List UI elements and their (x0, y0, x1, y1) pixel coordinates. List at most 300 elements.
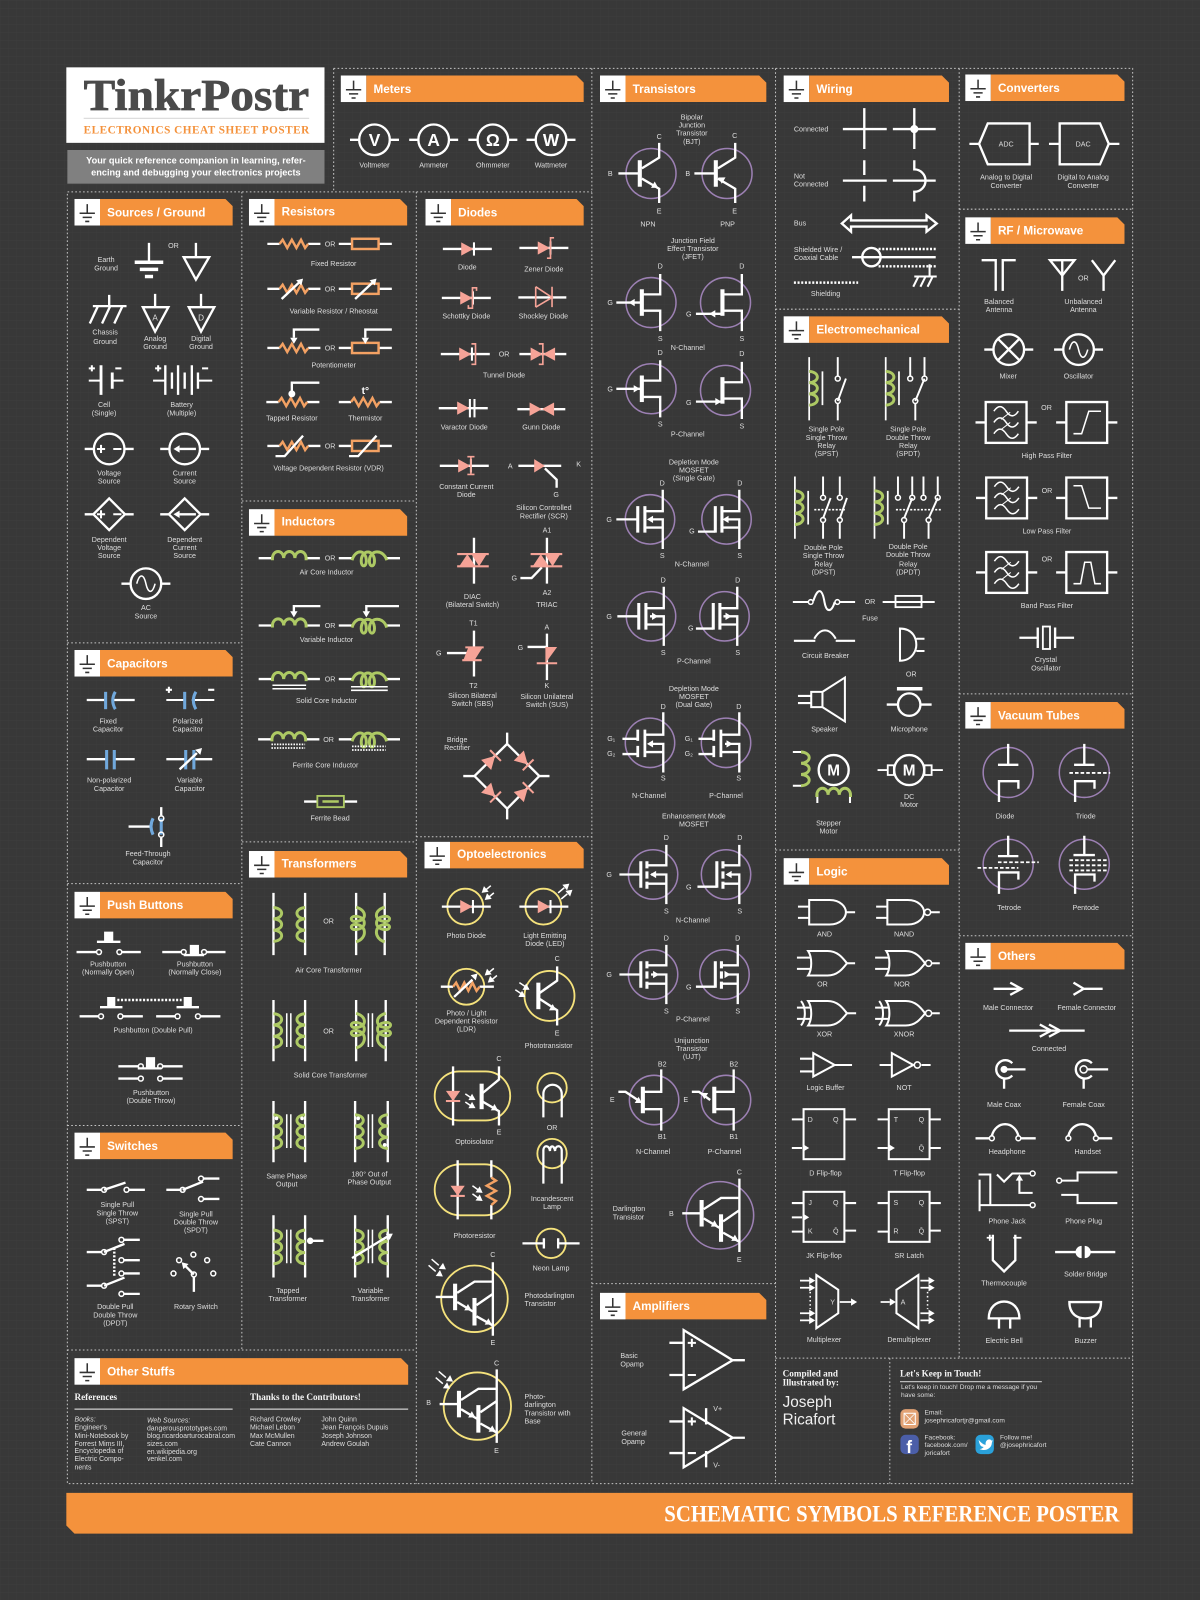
unbalanced antenna: Antenna (1070, 306, 1097, 314)
PNP transistor (685, 132, 752, 229)
D flip-flop (792, 1109, 856, 1178)
T flip-flop: Q̄ (919, 1144, 925, 1153)
voltmeter (350, 124, 399, 169)
DC motor: DC (904, 793, 914, 801)
SPST switch (87, 1183, 145, 1225)
JFET P-channel: D (739, 350, 744, 358)
neon lamp: Neon Lamp (533, 1264, 569, 1272)
female coax (1062, 1060, 1108, 1109)
references: Mini-Notebook by (74, 1433, 129, 1440)
JK flip-flop: Q̄ (833, 1228, 839, 1236)
SR latch: S (894, 1199, 899, 1207)
header: Amplifiers (600, 1293, 766, 1319)
bus: Bus (794, 220, 807, 228)
UJT N-channel: N-Channel (636, 1148, 671, 1156)
contact panel: Let's Keep in Touch! (900, 1369, 981, 1379)
analog to digital converter (969, 123, 1039, 190)
shielded wire: Shielded Wire / (794, 246, 842, 254)
cell (89, 365, 123, 417)
digital ground (189, 294, 214, 351)
header: Electromechanical: Electromechanical (816, 324, 920, 337)
solid core transformer: Solid Core Transformer (294, 1072, 368, 1080)
SPDT relay: Double Throw (886, 434, 931, 442)
contributors: Max McMullen (250, 1433, 295, 1440)
panel: push buttons (74, 892, 233, 1105)
SPST switch: (SPST) (106, 1217, 129, 1225)
panel: wiring (784, 76, 949, 298)
icon: twitter (976, 1435, 994, 1454)
low pass filter (976, 478, 1117, 536)
SPDT switch: (SPDT) (184, 1227, 208, 1235)
current source: Current (173, 470, 197, 478)
male connector (983, 983, 1034, 1012)
photodarlington transistor with base: darlington (524, 1401, 556, 1409)
neon lamp (522, 1229, 580, 1272)
tagline box: Your quick reference companion in learning, refer- (86, 155, 306, 165)
XOR gate (797, 1001, 856, 1039)
variable inductor: OR (325, 622, 335, 630)
stepper motor: Stepper (816, 820, 842, 828)
T flip-flop (878, 1109, 941, 1178)
JFET title: (JFET) (682, 253, 704, 261)
SPST relay: Relay (817, 442, 836, 450)
diode tube (983, 744, 1033, 820)
shockley diode (518, 287, 568, 320)
icon: email (900, 1409, 919, 1429)
icon: facebook: f (906, 1437, 912, 1457)
shielding: Shielding (811, 290, 840, 298)
ohmmeter: Ohmmeter (476, 161, 510, 169)
XNOR gate (875, 1001, 940, 1039)
depletion dual gate transistors: G₂ (685, 750, 693, 758)
analog ground (143, 294, 168, 351)
tagline box: encing and debugging your electronics projects (91, 168, 301, 178)
diode: Diode (458, 263, 477, 271)
earth ground: Earth (98, 256, 115, 264)
battery: (Multiple) (167, 409, 196, 417)
DPST relay: (DPST) (812, 568, 835, 576)
header: Converters (965, 74, 1124, 101)
triode tube (1059, 744, 1110, 820)
pushbutton normally close: (Normally Close) (168, 968, 221, 976)
mixer (984, 334, 1033, 381)
bridge rectifier (444, 733, 549, 819)
ammeter (409, 124, 458, 169)
high pass filter (976, 402, 1117, 460)
solid core inductor: Solid Core Inductor (296, 697, 358, 705)
depletion P-channel: S (735, 649, 740, 657)
PNP transistor: PNP (720, 221, 735, 229)
stepper motor (793, 752, 851, 836)
zener diode (519, 238, 568, 273)
enhancement P-channel: G (686, 983, 692, 991)
twitter text: @josephricafort (1000, 1442, 1047, 1449)
contributors: Jean François Dupuis (321, 1425, 389, 1432)
optoisolator (435, 1055, 510, 1146)
dependent current source (160, 498, 209, 560)
photodarlington transistor: Photodarlington (524, 1292, 574, 1300)
voltage source (85, 434, 134, 486)
air core transformer: OR (323, 917, 334, 925)
header: Transistors: Transistors (633, 83, 696, 96)
header: Push Buttons (74, 892, 233, 918)
pushbutton normally open: (Normally Open) (82, 968, 134, 976)
DPDT switch: Double Pull (97, 1303, 134, 1311)
fixed resistor: OR (325, 240, 335, 248)
dependent current source: Dependent (167, 536, 202, 544)
digital ground: D (198, 313, 204, 322)
tapped resistor: Tapped Resistor (266, 414, 318, 422)
tunnel diode (441, 344, 566, 380)
bridge rectifier: Rectifier (444, 744, 471, 752)
phototransistor: E (555, 1030, 560, 1038)
TRIAC: TRIAC (536, 601, 558, 609)
UJT N-channel: B2 (658, 1060, 667, 1068)
depletion P-channel: G (688, 625, 694, 633)
title block (66, 67, 324, 143)
header: Sources / Ground: Sources / Ground (107, 206, 205, 219)
enhancement P-channel: S (664, 1007, 669, 1015)
depletion dual gate transistors (607, 703, 751, 800)
TRIAC: A1 (543, 527, 551, 535)
references: en.wikipedia.org (147, 1449, 197, 1456)
band pass filter (976, 552, 1117, 610)
crystal oscillator: Crystal (1035, 656, 1057, 664)
header: Capacitors: Capacitors (107, 657, 168, 670)
multiplexer: Y (830, 1299, 835, 1307)
BJT title: (BJT) (683, 138, 701, 146)
silicon bilateral switch: T1 (469, 620, 478, 628)
zener diode: Zener Diode (524, 265, 564, 273)
multiplexer: Multiplexer (807, 1336, 842, 1344)
180 degree transformer: Phase Output (348, 1179, 391, 1187)
SR latch: Q (919, 1199, 925, 1207)
SPDT relay: Single Pole (890, 426, 926, 434)
enhancement P-channel: D (735, 934, 740, 942)
footer banner: SCHEMATIC SYMBOLS REFERENCE POSTER (664, 1501, 1120, 1527)
header: Optoelectronics (424, 842, 584, 868)
buzzer: Buzzer (1075, 1337, 1097, 1345)
phone jack (979, 1171, 1035, 1225)
phone plug: Phone Plug (1065, 1217, 1102, 1225)
pentode tube (1059, 836, 1109, 912)
cell: Cell (98, 401, 111, 409)
contributors (250, 1392, 408, 1448)
depletion N-channel (606, 480, 751, 568)
polarized capacitor: Capacitor (173, 726, 204, 734)
SPST relay: (SPST) (815, 450, 838, 458)
enhancement P-channel: G (606, 971, 612, 979)
depletion single gate title: (Single Gate) (673, 475, 715, 483)
contact panel (900, 1369, 1047, 1457)
speaker: Speaker (811, 726, 838, 734)
DC motor: Motor (900, 801, 919, 809)
pushbutton normally close: Pushbutton (177, 960, 213, 968)
references: Encyclopedia of (74, 1448, 123, 1455)
variable transformer (351, 1215, 395, 1303)
solid core transformer (273, 1000, 391, 1080)
JK flip-flop: Q (833, 1199, 839, 1207)
phototransistor (515, 955, 574, 1050)
silicon controlled rectifier: K (576, 460, 581, 468)
ohmmeter: Ω (486, 130, 500, 150)
JFET P-channel: P-Channel (671, 431, 705, 439)
current source: Source (173, 478, 196, 486)
photoresistor (435, 1160, 510, 1240)
dependent voltage source: Dependent (92, 536, 127, 544)
BJT title: Junction (679, 122, 705, 130)
facebook text: joricafort (923, 1450, 950, 1457)
microphone (887, 689, 932, 734)
UJT title: Unijunction (674, 1037, 709, 1045)
depletion single gate title: Depletion Mode (669, 458, 719, 466)
connected wires (794, 108, 936, 149)
silicon unilateral switch: K (545, 682, 550, 690)
DPDT relay: Double Pole (889, 543, 928, 551)
header: Logic (784, 858, 949, 885)
silicon unilateral switch (518, 624, 574, 709)
photodarlington transistor with base (426, 1359, 571, 1455)
incandescent lamp: Incandescent (531, 1195, 573, 1203)
chassis ground (90, 295, 127, 346)
solid core inductor: OR (325, 676, 335, 684)
DPST relay: Double Pole (804, 544, 843, 552)
ferrite core inductor (258, 733, 400, 769)
header: Diodes: Diodes (458, 206, 498, 219)
pushbutton double throw: Pushbutton (133, 1089, 169, 1097)
phone plug (1057, 1172, 1117, 1225)
JFET N-channel: S (658, 335, 663, 343)
depletion P-channel: P-Channel (677, 657, 711, 665)
panel: resistors (249, 199, 407, 472)
NOT gate (880, 1053, 931, 1092)
title: TinkrPostr (84, 70, 309, 120)
SPST switch: Single Throw (97, 1209, 139, 1217)
voltmeter: V (369, 130, 381, 150)
D flip-flop: D (808, 1116, 813, 1124)
voltmeter: Voltmeter (359, 161, 390, 169)
silicon controlled rectifier: A (508, 462, 513, 470)
basic opamp: Basic (620, 1352, 638, 1360)
ferrite core inductor: OR (323, 736, 334, 744)
UJT N-channel: E (610, 1096, 615, 1104)
JFET title: Effect Transistor (667, 245, 719, 253)
balanced antenna: Balanced (984, 298, 1014, 306)
ferrite core inductor: Ferrite Core Inductor (293, 761, 359, 769)
depletion dual gate transistors: S (661, 775, 666, 783)
darlington transistor: Transistor (613, 1213, 645, 1221)
credits: compiled by: Joseph (783, 1394, 832, 1411)
basic opamp: Opamp (620, 1360, 644, 1368)
light dependent resistor (435, 968, 498, 1034)
earth ground: Ground (94, 264, 118, 272)
header: Meters (341, 76, 584, 102)
enhancement N-channel: N-Channel (676, 916, 710, 924)
incandescent lamp: Lamp (543, 1203, 561, 1211)
general opamp: Opamp (621, 1438, 645, 1446)
references: sizes.com (147, 1441, 178, 1448)
polarized capacitor: Polarized (173, 717, 203, 725)
DPDT switch (87, 1237, 140, 1328)
twitter text: Follow me! (1000, 1434, 1032, 1441)
UJT P-channel: B1 (729, 1133, 738, 1141)
basic opamp (620, 1330, 745, 1389)
references (74, 1392, 235, 1471)
solid core inductor (259, 672, 400, 705)
T flip-flop: Q (919, 1116, 925, 1124)
SPST relay (806, 357, 848, 458)
ammeter: Ammeter (419, 161, 449, 169)
constant current diode: Diode (457, 491, 476, 499)
band pass filter: OR (1042, 556, 1052, 564)
header: Other Stuffs: Other Stuffs (107, 1366, 175, 1379)
depletion N-channel: G (689, 528, 695, 536)
credits: compiled by: Compiled and (783, 1369, 838, 1379)
DPST relay: Single Throw (803, 552, 845, 560)
tetrode tube (978, 836, 1039, 912)
header: Sources / Ground (74, 199, 233, 226)
BJT title: Transistor (676, 130, 708, 138)
email text: Email: (924, 1409, 943, 1416)
AND gate (798, 900, 855, 939)
silicon bilateral switch: T2 (469, 682, 478, 690)
logic buffer: Logic Buffer (807, 1084, 845, 1092)
UJT title: Transistor (676, 1045, 708, 1053)
darlington transistor: C (737, 1168, 742, 1176)
thermocouple: Thermocouple (981, 1280, 1027, 1288)
low pass filter: Low Pass Filter (1023, 528, 1072, 536)
dependent voltage source: Source (98, 552, 121, 560)
NAND gate: NAND (894, 931, 914, 939)
gunn diode: Gunn Diode (522, 424, 560, 432)
SPDT relay (886, 357, 931, 458)
digital to analog converter: Digital to Analog (1057, 174, 1109, 182)
electric bell (985, 1302, 1023, 1345)
oscillator (1054, 334, 1103, 381)
SPST relay: Single Pole (809, 426, 845, 434)
depletion dual gate transistors: G₁ (607, 735, 616, 743)
unbalanced antenna: OR (1078, 275, 1089, 283)
facebook text: Facebook: (924, 1434, 956, 1441)
depletion P-channel: D (661, 577, 666, 585)
diode (443, 242, 492, 271)
light dependent resistor: Dependent Resistor (435, 1017, 498, 1025)
light emitting diode: Light Emitting (523, 932, 567, 940)
JFET N-channel: D (739, 262, 744, 270)
JFET P-channel (607, 349, 751, 439)
references: References (74, 1392, 118, 1402)
high pass filter: High Pass Filter (1022, 452, 1073, 460)
UJT P-channel: B2 (729, 1060, 738, 1068)
header: Switches: Switches (107, 1140, 158, 1153)
TRIAC: G (512, 575, 518, 583)
JK flip-flop: K (808, 1228, 813, 1236)
DPDT relay: (DPDT) (896, 568, 920, 576)
references: Electric Compo- (74, 1456, 124, 1463)
JFET N-channel: D (658, 262, 663, 270)
header: RF / Microwave: RF / Microwave (998, 225, 1084, 238)
JFET P-channel: D (658, 349, 663, 357)
depletion P-channel: D (735, 577, 740, 585)
same phase transformer (266, 1101, 307, 1189)
JFET N-channel: G (607, 299, 613, 307)
balanced antenna (982, 260, 1016, 314)
photodarlington transistor with base: E (494, 1447, 499, 1455)
tapped transformer: Tapped (276, 1287, 299, 1295)
digital to analog converter (1049, 123, 1119, 190)
digital to analog converter: DAC (1076, 140, 1091, 148)
multiplexer (800, 1275, 857, 1344)
fixed capacitor (87, 692, 135, 734)
ammeter: A (427, 130, 440, 150)
header: Switches (74, 1133, 233, 1159)
header: Electromechanical (784, 316, 949, 343)
optoisolator: E (497, 1129, 502, 1137)
credits: compiled by (783, 1369, 839, 1428)
header: Others: Others (998, 950, 1036, 963)
header: Other Stuffs (74, 1358, 408, 1385)
pushbutton normally open: Pushbutton (90, 960, 126, 968)
references: nents (74, 1464, 92, 1471)
DPDT relay: Double Throw (886, 551, 931, 559)
UJT title: (UJT) (683, 1053, 701, 1061)
enhancement N-channel: G (686, 883, 692, 891)
photodarlington transistor: Transistor (524, 1300, 557, 1308)
DIAC (446, 538, 499, 609)
pushbutton double throw: (Double Throw) (127, 1097, 176, 1105)
references: Engineer's (74, 1425, 108, 1432)
digital ground: Digital (191, 335, 211, 343)
depletion dual gate transistors: P-Channel (709, 792, 743, 800)
current source (160, 434, 209, 486)
references: Books: (74, 1416, 96, 1423)
variable inductor: Variable Inductor (300, 636, 354, 644)
polarized capacitor (166, 687, 214, 734)
XNOR gate: XNOR (894, 1031, 914, 1039)
constant current diode: Constant Current (439, 483, 493, 491)
general opamp: General (621, 1430, 647, 1438)
air core transformer: Air Core Transformer (295, 966, 362, 974)
variable resistor: OR (325, 285, 335, 293)
header: Vacuum Tubes (965, 702, 1124, 729)
connected wires: Connected (794, 126, 828, 134)
silicon unilateral switch: Silicon Unilateral (520, 693, 574, 701)
icon: facebook (900, 1435, 919, 1457)
connected connector (1009, 1024, 1085, 1053)
depletion N-channel: N-Channel (675, 560, 709, 568)
light dependent resistor: Photo / Light (446, 1009, 486, 1017)
DIAC: (Bilateral Switch) (446, 601, 499, 609)
variable capacitor: Variable (177, 777, 203, 785)
solid core transformer: OR (323, 1028, 334, 1036)
circuit breaker (794, 630, 855, 660)
email text: josephricafortjr@gmail.com (923, 1417, 1005, 1424)
DIAC: DIAC (464, 593, 481, 601)
depletion N-channel: S (660, 552, 665, 560)
fixed resistor: Fixed Resistor (311, 260, 357, 268)
OR gate (797, 951, 855, 989)
voltage source: Source (98, 478, 121, 486)
chassis ground: Ground (93, 338, 117, 346)
NOR gate (875, 951, 940, 989)
depletion dual gate transistors: D (736, 703, 741, 711)
phototransistor: C (555, 955, 560, 963)
JFET P-channel: S (739, 423, 744, 431)
header: Optoelectronics: Optoelectronics (457, 848, 547, 861)
header: Wiring: Wiring (816, 83, 853, 96)
header: RF / Microwave (965, 217, 1124, 244)
JFET P-channel: G (607, 385, 613, 393)
